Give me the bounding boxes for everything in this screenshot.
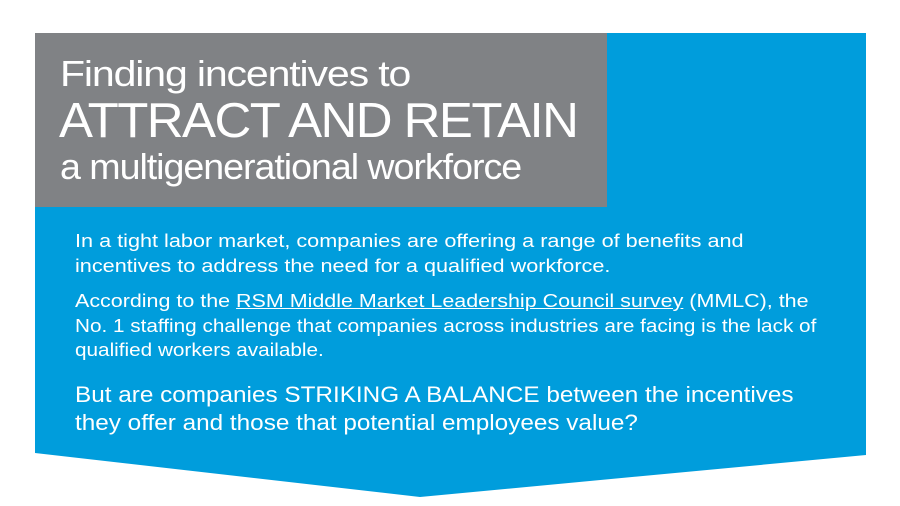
question — [75, 382, 794, 435]
title box — [35, 33, 607, 207]
survey paragraph: No. 1 staffing challenge that companies across industries are facing is the lack of — [75, 314, 816, 336]
intro paragraph — [75, 230, 744, 276]
question: they offer and those that potential employees value? — [75, 410, 638, 435]
title line 1: Finding incentives to — [60, 53, 410, 94]
title line 2: ATTRACT AND RETAIN — [59, 94, 577, 148]
intro paragraph: incentives to address the need for a qualified workforce. — [75, 254, 610, 276]
title line 3: a multigenerational workforce — [60, 146, 521, 187]
question: But are companies STRIKING A BALANCE between the incentives — [75, 382, 794, 407]
survey paragraph — [75, 290, 816, 360]
intro paragraph: In a tight labor market, companies are offering a range of benefits and — [75, 230, 744, 251]
survey paragraph: qualified workers available. — [75, 339, 324, 360]
survey paragraph: According to the RSM Middle Market Leadership Council survey (MMLC), the — [75, 290, 809, 311]
